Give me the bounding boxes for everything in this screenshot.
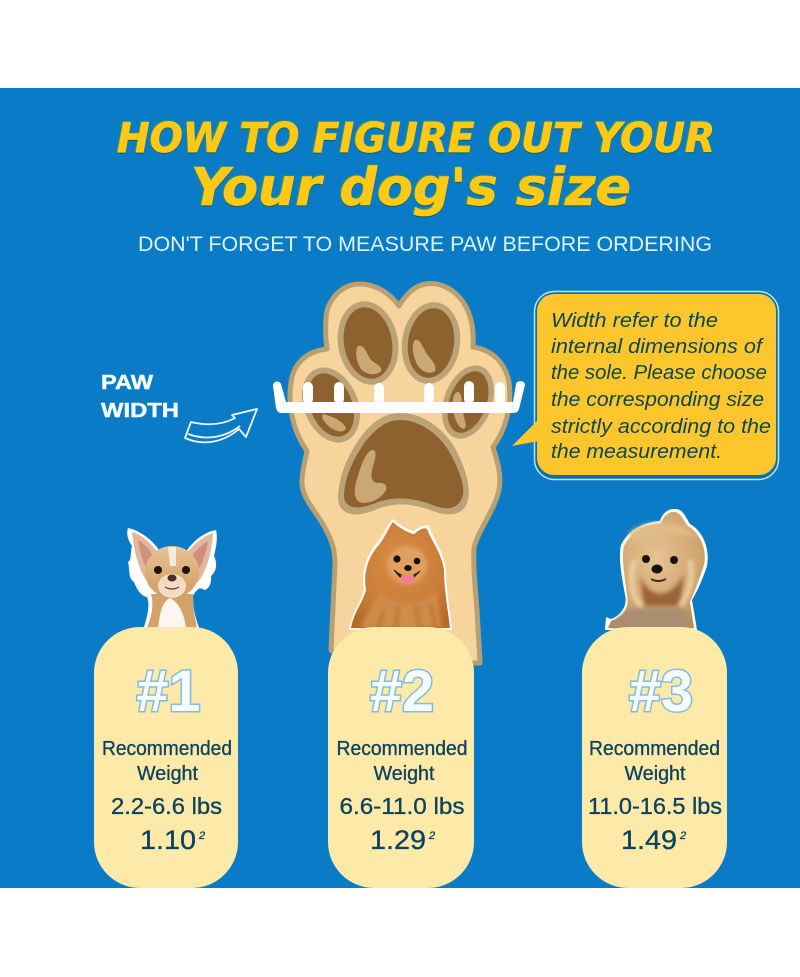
- card 3: 1.49: [621, 825, 677, 855]
- paw width label: WIDTH: [101, 399, 179, 422]
- top left toe pad: [331, 296, 405, 390]
- dog: chihuahua: [127, 528, 217, 630]
- card 3: 2: [679, 830, 686, 842]
- arrow: [185, 409, 257, 442]
- left toe pad: [291, 359, 371, 451]
- card 2: 2: [428, 830, 435, 842]
- paw width label: PAW: [101, 371, 154, 394]
- dog: yorkie: [605, 509, 708, 630]
- card 2: 6.6-11.0 lbs: [340, 793, 464, 819]
- card 2: Recommended: [336, 738, 468, 760]
- callout: [512, 292, 778, 480]
- paw width label: [101, 371, 179, 422]
- dog: pomeranian: [349, 519, 452, 630]
- card 3: Weight: [624, 762, 686, 785]
- title: [117, 114, 715, 218]
- paw and leg silhouette: [290, 284, 510, 663]
- card 3: 11.0-16.5 lbs: [588, 793, 722, 819]
- main pad: [338, 413, 469, 514]
- card 3 number: #3: [629, 659, 693, 724]
- callout: the corresponding size: [551, 388, 764, 411]
- callout: the sole. Please choose: [551, 361, 767, 384]
- card 1: 1.10: [140, 825, 196, 855]
- callout: Width refer to the: [551, 309, 718, 332]
- callout: internal dimensions of: [551, 335, 764, 358]
- card 1 number: #1: [136, 659, 200, 724]
- card 3: [582, 627, 727, 888]
- ruler: [273, 381, 525, 413]
- callout: strictly according to the: [551, 415, 771, 438]
- top right toe pad: [397, 298, 465, 388]
- card 1: Recommended: [102, 738, 232, 760]
- title: HOW TO FIGURE OUT YOUR: [117, 114, 715, 162]
- callout: the measurement.: [551, 440, 722, 463]
- card 2: [328, 627, 474, 888]
- subtitle: DON'T FORGET TO MEASURE PAW BEFORE ORDERING: [138, 233, 712, 256]
- right toe pad: [432, 358, 504, 446]
- paw illustration: [290, 284, 510, 663]
- card 2: Weight: [374, 762, 435, 785]
- card 2 number: #2: [370, 659, 434, 724]
- card 1: Weight: [137, 762, 198, 785]
- card 2: 1.29: [370, 825, 426, 855]
- title: Your dog's size: [191, 158, 631, 218]
- card 1: 2.2-6.6 lbs: [111, 793, 222, 819]
- card 3: Recommended: [589, 738, 720, 760]
- card 1: 2: [198, 830, 205, 842]
- card 1: [94, 627, 238, 888]
